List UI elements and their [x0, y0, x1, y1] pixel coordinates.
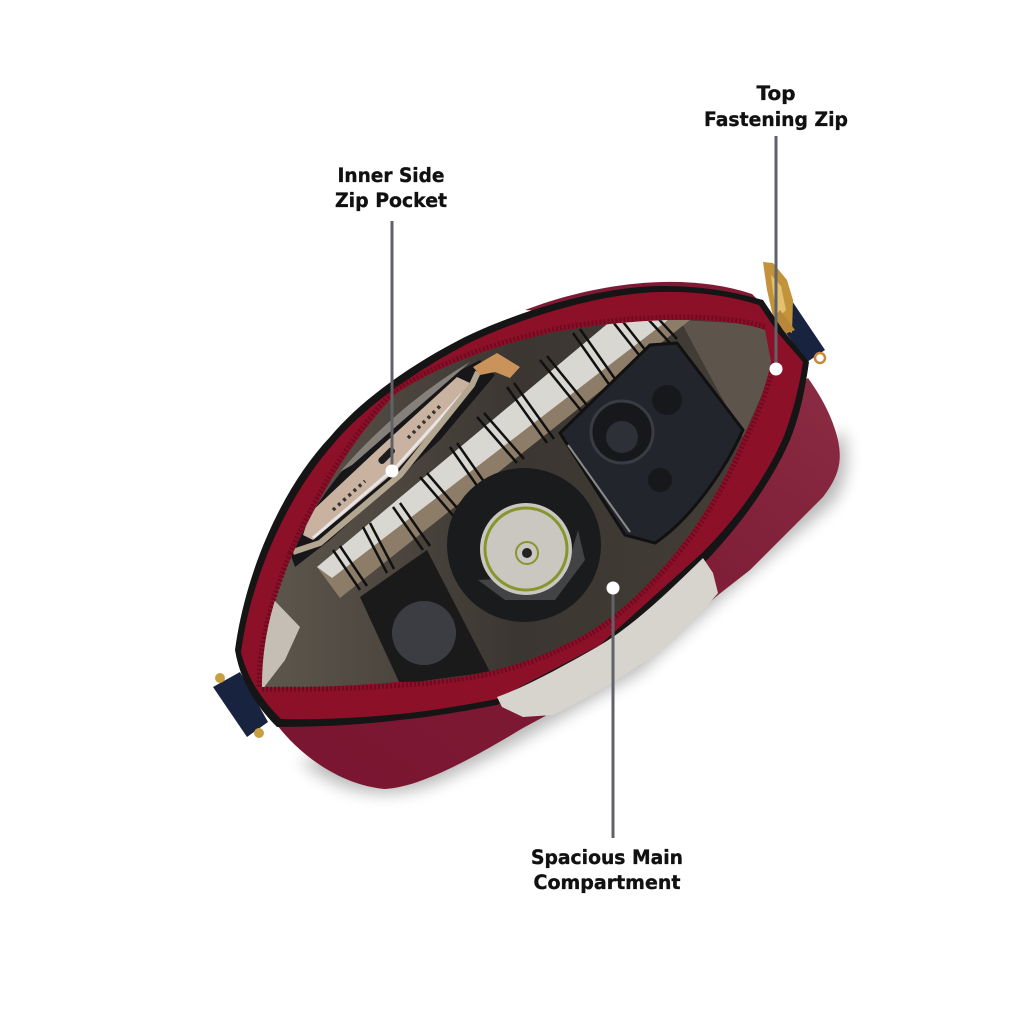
- label: Top Fastening Zip: [704, 82, 848, 131]
- label: Spacious Main Compartment: Spacious Main: [531, 846, 683, 869]
- phone in pocket: [303, 377, 470, 540]
- label: Top Fastening Zip: Top: [756, 82, 796, 105]
- lower phone case: [360, 550, 490, 684]
- inner side zip pocket: [290, 360, 495, 567]
- bag: red zip band: [241, 292, 803, 719]
- phone lens: [392, 601, 456, 665]
- notebook: [317, 314, 690, 598]
- pocket zip tape: [293, 372, 478, 552]
- bag: zipper teeth: [259, 317, 774, 689]
- bag: top sliver of maroon back panel: [525, 282, 770, 315]
- label: Spacious Main Compartment: Compartment: [534, 871, 680, 894]
- label: Inner Side Zip Pocket: Inner Side: [338, 164, 444, 187]
- label: Top Fastening Zip: Fastening Zip: [704, 108, 848, 131]
- notebook: spiral wires: [333, 314, 677, 590]
- bag: black rim: [235, 286, 809, 727]
- pocket zip pull: [473, 353, 520, 378]
- bag: drop shadow: [300, 430, 846, 793]
- lining: right corner: [680, 320, 775, 437]
- lining: left corner light fold: [262, 600, 300, 690]
- bag illustration: [213, 262, 846, 793]
- label: Inner Side Zip Pocket: Zip Pocket: [335, 189, 447, 212]
- bag: left strap tab: [213, 672, 268, 738]
- label: Inner Side Zip Pocket: [335, 164, 447, 212]
- leader line: Inner Side Zip Pocket: [386, 221, 398, 478]
- dark rectangular case with lenses: [560, 343, 743, 543]
- round compact case: [447, 468, 601, 622]
- label: Spacious Main Compartment: [531, 846, 683, 894]
- leader line: Top Fastening Zip: [770, 136, 782, 376]
- bag: interior contents: [262, 314, 775, 690]
- bag: outer maroon body: [277, 378, 840, 789]
- bag: right strap and buckle: [760, 262, 825, 363]
- bag: grey leather flap: [497, 558, 718, 717]
- bag: interior lining: [262, 320, 771, 687]
- leader line: Spacious Main Compartment: [606, 582, 620, 838]
